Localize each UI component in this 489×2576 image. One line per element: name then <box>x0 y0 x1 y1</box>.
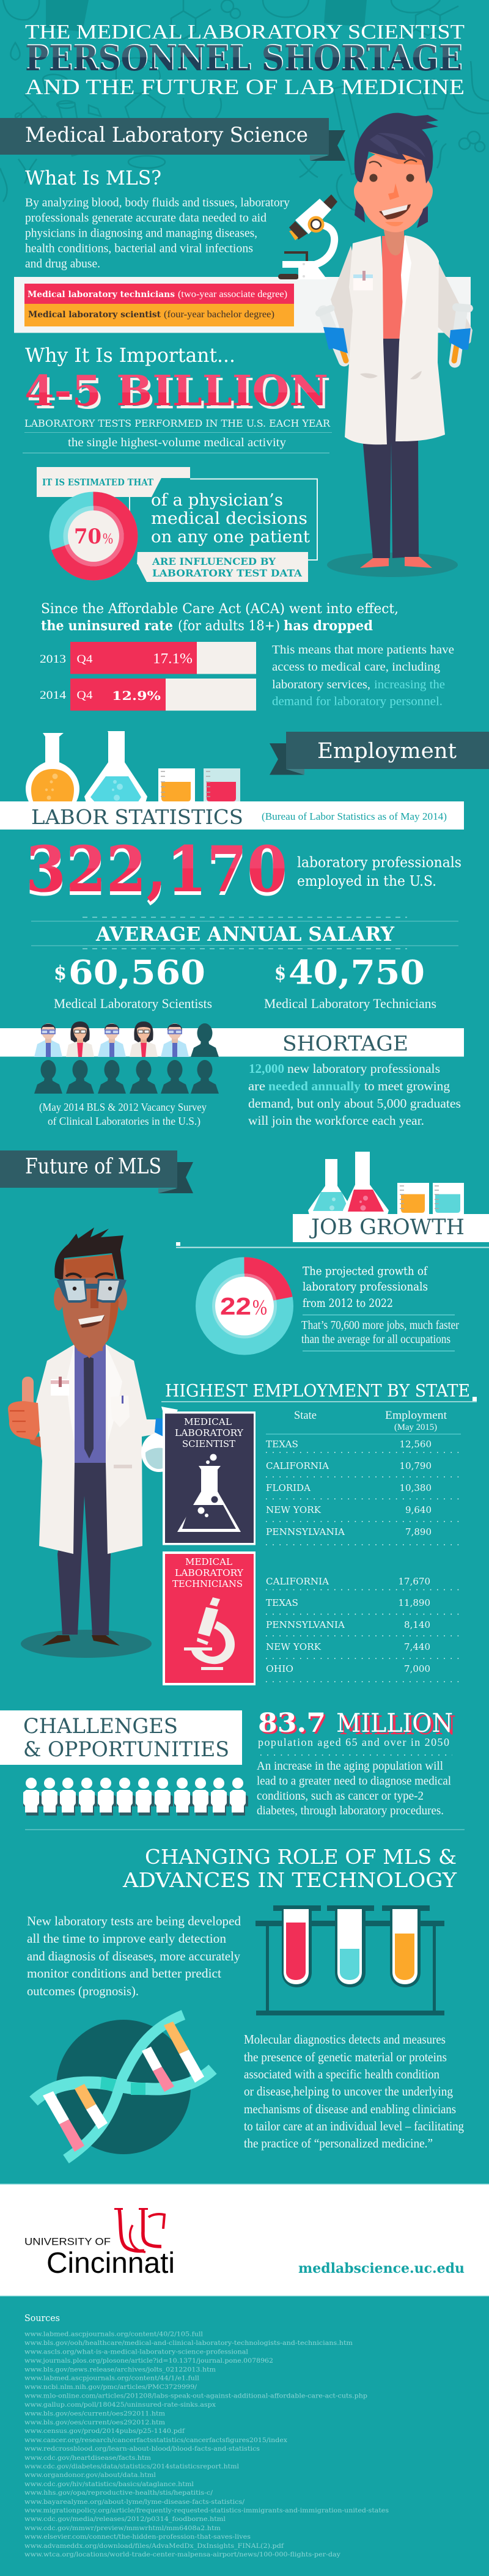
heading: changing role: ADVANCES IN TECHNOLOGY <box>122 1868 457 1892</box>
mouth <box>78 1315 105 1328</box>
text: job growth description: than the average for all occupations <box>301 1333 450 1346</box>
text block: source list: www.ascls.org/what-is-a-medical-laboratory-science-professional <box>24 2349 248 2356</box>
text: job growth description: The projected growth of <box>303 1264 428 1278</box>
heading: highest employment by state: HIGHEST EMPLOYMENT BY STATE <box>165 1381 470 1401</box>
heading: SHORTAGE <box>282 1032 408 1056</box>
degree row: scientist: (four-year bachelor degree) <box>164 309 274 320</box>
text block: source list: www.cdc.gov/heartdisease/facts.htm <box>24 2455 152 2462</box>
text: new laboratory tests: all the time to improve early detection <box>27 1931 226 1946</box>
text: meaning of the drop: This means that more patients have <box>272 643 454 657</box>
row texas: 12,560 <box>400 1438 432 1449</box>
ears <box>54 1287 64 1311</box>
title line 1: THE MEDICAL LABORATORY SCIENTIST <box>25 21 465 43</box>
text block: MLS description: physicians in diagnosing and managing diseases, <box>25 226 257 240</box>
text: aging population <box>257 1759 451 1817</box>
text block: source list: www.organdonor.gov/about/data.html <box>24 2472 156 2479</box>
icon: man scientist <box>8 1227 178 1658</box>
text: meaning of the drop: demand for laboratory personnel. <box>272 694 443 708</box>
salary: technicians: 40,750 <box>289 952 425 992</box>
callout statement: on any one patient <box>151 528 310 546</box>
donut chart 70% <box>49 491 138 581</box>
text: job growth description: from 2012 to 2022 <box>303 1297 393 1310</box>
text: shortage description: to meet growing <box>364 1078 450 1093</box>
row pennsylvania: PENNSYLVANIA <box>266 1619 345 1630</box>
text block: source list: www.bls.gov/oes/current/oes292012.htm <box>24 2420 166 2426</box>
ribbon tail <box>310 130 345 161</box>
UC monogram <box>114 2209 164 2252</box>
stat: 83.7 million <box>258 1708 456 1748</box>
text: laboratory professionals employed <box>297 855 461 889</box>
bar 2013: Q4 <box>77 653 93 666</box>
panel label: SCIENTIST <box>182 1440 235 1449</box>
text block: source list: www.migrationpolicy.org/article/frequently-requested-statistics-immigrants-and-immigration-united-states <box>24 2508 389 2514</box>
neck <box>384 226 404 256</box>
icon: glassware shelf <box>26 731 240 803</box>
degree row: technicians <box>24 284 294 304</box>
row california: CALIFORNIA <box>266 1460 329 1471</box>
panel: degree types <box>14 277 471 333</box>
row texas <box>266 1597 430 1608</box>
university of: UNIVERSITY OF <box>24 2236 111 2248</box>
big number: 4-5 billion: 4-5 BILLION <box>24 367 328 416</box>
donut chart 70%: 70 <box>74 524 101 549</box>
text block: source list: www.bls.gov/oes/current/oes292011.htm <box>24 2411 166 2418</box>
panel: footer logo band <box>0 2184 489 2297</box>
coat right <box>106 1344 160 1554</box>
row new york <box>266 1504 432 1515</box>
text: meaning of the drop: access to medical care, including <box>272 660 440 674</box>
bottom tab text: LABORATORY TEST DATA <box>152 567 303 579</box>
text: meaning of the drop: laboratory services, <box>272 678 370 691</box>
beaker orange <box>158 768 195 801</box>
text block: source list: www.bayarealyme.org/about-lyme/lyme-disease-facts-statistics/ <box>24 2499 245 2506</box>
face <box>62 1254 119 1356</box>
degree row: technicians: (two-year associate degree) <box>178 289 287 300</box>
degree row: scientist <box>24 304 294 326</box>
text: shortage source <box>39 1101 207 1128</box>
stat caption: population aged 65 and over in 2050 <box>258 1736 449 1748</box>
big number: 4-5 billion: 4-5 BILLION <box>27 370 331 419</box>
panel: medical laboratory technicians <box>163 1551 256 1685</box>
text: laboratory professionals employed: laboratory professionals <box>297 855 461 870</box>
row california: 10,790 <box>400 1460 432 1471</box>
table: technician employment by state <box>266 1576 462 1682</box>
bar chart: uninsured rate <box>40 642 256 710</box>
row california <box>266 1576 430 1587</box>
row california: CALIFORNIA <box>266 1576 329 1587</box>
text: shortage description: needed annually <box>268 1078 361 1093</box>
text block: MLS description: health conditions, bacterial and viral infections <box>25 242 253 256</box>
icon: DNA helix <box>34 2015 213 2159</box>
badge <box>51 1377 69 1396</box>
name badge <box>353 271 373 290</box>
text: new laboratory tests <box>27 1913 241 1998</box>
conical flask cyan <box>308 1159 353 1215</box>
right test tube <box>449 303 473 362</box>
icon: workforce people grid <box>34 1021 219 1094</box>
stat: 83.7 million: 83.7 <box>260 1710 328 1740</box>
bar 2014: 2014 <box>40 689 67 702</box>
text: shortage description: new laboratory professionals <box>287 1061 440 1076</box>
stat: 83.7 million: 83.7 <box>258 1708 326 1739</box>
row new york <box>266 1641 430 1652</box>
coat right <box>395 235 445 441</box>
salary: scientists <box>54 952 212 1011</box>
text: highest volume activity: the single highest-volume medical activity <box>68 436 286 449</box>
text block: source list: www.cdc.gov/media/releases/2012/p0314_foodborne.html <box>24 2516 226 2523</box>
text: aging population: diabetes, through laboratory procedures. <box>257 1804 444 1817</box>
heading: what is MLS: What Is MLS? <box>25 166 161 190</box>
shirt <box>75 1344 106 1463</box>
banner heading: Future of MLS <box>25 1154 161 1179</box>
rungs <box>43 2022 204 2152</box>
text: meaning of the drop: increasing the <box>374 678 445 691</box>
bar 2013: 17.1% <box>153 651 193 667</box>
sleeves <box>331 246 361 362</box>
icon: test tube rack <box>256 1905 444 2015</box>
panel: section banner employment <box>270 732 489 775</box>
panel label: TECHNICIANS <box>172 1580 243 1589</box>
tab text: IT IS ESTIMATED THAT <box>42 477 154 488</box>
text: shortage source: of Clinical Laboratories in the U.S.) <box>48 1115 200 1128</box>
text: molecular diagnostics: Molecular diagnostics detects and measures <box>244 2032 446 2047</box>
icon: woman scientist <box>314 113 473 577</box>
text: new laboratory tests: outcomes (prognosis). <box>27 1984 139 1998</box>
text: job growth description: laboratory professionals <box>303 1280 428 1294</box>
table header: (May 2015) <box>394 1422 437 1432</box>
panel: medical laboratory scientist <box>163 1411 256 1545</box>
icon: job growth glassware <box>308 1152 464 1215</box>
panel: section banner medical laboratory science <box>0 118 345 161</box>
feet <box>360 558 389 568</box>
icon: row of people <box>23 1778 248 1816</box>
degree row: technicians: Medical laboratory technicians <box>28 290 175 300</box>
text block: source list: www.mlo-online.com/articles/201208/labs-speak-out-against-additional-affordable-care-act-cuts.php <box>24 2393 367 2400</box>
text: molecular diagnostics: the presence of genetic material or proteins <box>244 2050 447 2064</box>
panel label: LABORATORY <box>175 1429 243 1438</box>
beaker orange <box>397 1183 429 1214</box>
row pennsylvania: PENNSYLVANIA <box>266 1526 345 1537</box>
text block: source list: www.ncbi.nlm.nih.gov/pmc/articles/PMC3729999/ <box>24 2384 197 2391</box>
text: meaning of the drop <box>272 643 454 708</box>
panel: challenges and opportunities heading: & OPPORTUNITIES <box>23 1737 229 1762</box>
icon: flask <box>177 1454 241 1532</box>
bar 2014 <box>40 679 256 710</box>
text: molecular diagnostics: associated with a specific health condition <box>244 2067 439 2081</box>
nose <box>388 183 399 200</box>
text block: source list: www.cdc.gov/mmwr/preview/mmwrhtml/mm6408a2.htm <box>24 2525 221 2532</box>
text: laboratory professionals employed: employed in the U.S. <box>297 874 436 889</box>
text: aging population: An increase in the aging population will <box>257 1759 443 1773</box>
row new york: NEW YORK <box>266 1641 322 1652</box>
banner heading: Medical Laboratory Science <box>25 123 308 147</box>
panel label: LABORATORY <box>175 1569 243 1578</box>
text block: source list: www.advameddx.org/download/files/AdvaMedDx_DxInsights_FINAL(2).pdf <box>24 2543 284 2550</box>
text block: source list: www.cdc.gov/diabetes/data/statistics/2014statisticsreport.html <box>24 2464 239 2470</box>
glasses <box>57 1279 127 1303</box>
mouth <box>379 204 411 219</box>
callout statement: medical decisions <box>151 509 307 528</box>
text block: source list: www.bls.gov/ooh/healthcare/medical-and-clinical-laboratory-technologists-and-technicians.htm <box>24 2340 353 2347</box>
text block: source list <box>24 2331 389 2558</box>
text: affordable care act: the uninsured rate <box>41 618 173 634</box>
text block: MLS description: By analyzing blood, body fluids and tissues, laboratory <box>25 196 290 209</box>
text: molecular diagnostics: mechanisms of disease and enabling clinicians <box>244 2102 456 2116</box>
salary: technicians: Medical Laboratory Technicians <box>264 996 436 1011</box>
text block: source list: www.bls.gov/news.release/archives/jolts_02122013.htm <box>24 2366 216 2373</box>
heading: average annual salary: AVERAGE ANNUAL SALARY <box>95 922 395 946</box>
text block: source list: www.gallup.com/poll/180425/uninsured-rate-sinks.aspx <box>24 2402 216 2409</box>
panel: job growth heading <box>293 1214 489 1242</box>
text: aging population: conditions, such as cancer or type-2 <box>257 1789 424 1803</box>
salary: scientists: $ <box>54 961 67 984</box>
big number: 322,170: 322,170 <box>26 836 287 910</box>
row florida <box>266 1482 432 1493</box>
round flask <box>26 733 79 803</box>
shirt <box>382 236 405 339</box>
text block: source list: www.elsevier.com/connect/the-hidden-profession-that-saves-lives <box>24 2534 251 2541</box>
row california <box>266 1460 432 1471</box>
stat: 83.7 million: MILLION <box>336 1708 453 1738</box>
table header: Employment <box>385 1409 447 1422</box>
bottom tab text <box>152 556 303 579</box>
heading: changing role <box>122 1845 457 1892</box>
heading: LABOR STATISTICS <box>31 805 243 829</box>
text block: source list: www.hhs.gov/opa/reproductive-health/stis/hepatitis-c/ <box>24 2490 213 2497</box>
text: affordable care act: (for adults 18+) <box>178 619 280 634</box>
floor shadow <box>327 553 458 577</box>
coat left <box>345 236 387 444</box>
text: affordable care act: has dropped <box>284 618 373 634</box>
source note: (Bureau of Labor Statistics as of May 2014) <box>262 811 447 822</box>
conical flask <box>84 731 147 803</box>
panel label <box>175 1418 243 1449</box>
banner heading: Employment <box>317 739 457 764</box>
coat pockets <box>360 374 378 378</box>
degree row: scientist: Medical laboratory scientist <box>28 310 161 320</box>
callout outline <box>130 479 317 560</box>
row texas: TEXAS <box>266 1438 298 1449</box>
text block: source list: www.labmed.ascpjournals.org/content/40/2/105.full <box>24 2331 203 2338</box>
row texas <box>266 1438 432 1449</box>
panel: challenges and opportunities heading <box>0 1710 242 1765</box>
eyebrows <box>66 1273 113 1278</box>
trousers <box>57 1458 111 1635</box>
website: medlabscience.uc.edu <box>298 2261 465 2276</box>
panel label: MEDICAL <box>185 1558 232 1567</box>
rack <box>256 1905 444 2015</box>
nose <box>90 1290 99 1308</box>
text: new laboratory tests: and diagnosis of diseases, more accurately <box>27 1949 240 1963</box>
text block: source list: www.journals.plos.org/plosone/article?id=10.1371/journal.pone.0078962 <box>24 2358 273 2364</box>
neck <box>78 1339 103 1351</box>
eyes <box>369 174 378 182</box>
flask in hand <box>141 1407 178 1472</box>
text: aging population: lead to a greater need to diagnose medical <box>257 1775 451 1788</box>
bar 2014: Q4 <box>77 689 93 702</box>
icon: microscope <box>278 194 337 279</box>
text block: source list: www.cdc.gov/hiv/statistics/basics/ataglance.html <box>24 2481 194 2488</box>
bar 2014: 12.9% <box>112 688 161 703</box>
cyan tube <box>335 1909 366 1987</box>
text: shortage description: 12,000 <box>249 1061 284 1076</box>
donut chart 22%: 22 <box>220 1294 251 1320</box>
background doodles <box>0 0 489 211</box>
beaker red <box>204 768 240 801</box>
icon: microscope <box>184 1597 235 1670</box>
donut chart 22% <box>196 1257 293 1355</box>
text: shortage description <box>248 1061 461 1128</box>
text: laboratory tests performed: LABORATORY TESTS PERFORMED IN THE U.S. EACH YEAR <box>24 418 331 429</box>
heading: sources: Sources <box>24 2313 60 2324</box>
row new york: 9,640 <box>405 1504 432 1515</box>
bottom tab text: ARE INFLUENCED BY <box>152 556 276 567</box>
text: molecular diagnostics <box>244 2032 464 2151</box>
panel: job growth heading: JOB GROWTH <box>309 1215 465 1240</box>
text: job growth description <box>301 1264 459 1351</box>
face <box>354 150 433 232</box>
text: molecular diagnostics: or disease,helping to uncover the underlying <box>244 2084 453 2099</box>
salary: scientists: Medical Laboratory Scientists <box>54 996 212 1011</box>
row ohio: OHIO <box>266 1663 293 1674</box>
text: shortage description: are <box>248 1078 265 1093</box>
red tube <box>282 1909 312 1987</box>
side hair <box>355 201 365 223</box>
row florida: 10,380 <box>400 1482 432 1493</box>
text: new laboratory tests: monitor conditions and better predict <box>27 1966 221 1981</box>
row new york: NEW YORK <box>266 1504 322 1515</box>
trousers centre <box>383 339 400 443</box>
panel: challenges and opportunities heading: CHALLENGES <box>23 1714 178 1739</box>
beaker cyan <box>433 1183 464 1214</box>
orange tube <box>390 1909 421 1987</box>
floor shadow <box>21 1630 152 1658</box>
legs <box>362 437 419 558</box>
callout tab top <box>37 467 190 497</box>
row texas: 11,890 <box>399 1597 430 1608</box>
row ohio <box>266 1663 430 1674</box>
row ohio: 7,000 <box>404 1663 430 1674</box>
salary: technicians: $ <box>274 961 286 984</box>
title line 3: AND THE FUTURE OF LAB MEDICINE <box>25 75 465 99</box>
logo: University of Cincinnati <box>24 2209 175 2280</box>
title <box>25 21 465 99</box>
panel label: MEDICAL <box>184 1418 232 1427</box>
text: shortage description: demand, but only about 5,000 graduates <box>248 1096 461 1111</box>
text: shortage source: (May 2014 BLS & 2012 Vacancy Survey <box>39 1101 207 1114</box>
big number: 322,170: 322,170 <box>26 833 287 907</box>
left test tube <box>314 304 348 361</box>
row pennsylvania: 8,140 <box>404 1619 430 1630</box>
bar 2013: 2013 <box>40 653 66 666</box>
text block: source list: www.census.gov/prod/2014pubs/p25-1140.pdf <box>24 2428 185 2435</box>
text: molecular diagnostics: the practice of “personalized medicine.” <box>244 2136 433 2151</box>
text block: source list: www.redcrossblood.org/learn-about-blood/blood-facts-and-statistics <box>24 2446 260 2453</box>
table header: State <box>294 1409 317 1422</box>
text block: source list: www.cancer.org/research/cancerfactsstatistics/cancerfactsfigures2015/index <box>24 2437 287 2444</box>
heading: why it is important: Why It Is Important... <box>25 344 235 367</box>
donut chart 70%: % <box>103 531 113 547</box>
text: affordable care act <box>41 602 399 634</box>
text: job growth description: That’s 70,600 more jobs, much faster <box>301 1319 459 1332</box>
callout tab bottom <box>128 552 308 582</box>
row pennsylvania: 7,890 <box>405 1526 432 1537</box>
text block: MLS description: and drug abuse. <box>25 257 100 270</box>
cincinnati: Cincinnati <box>46 2247 175 2280</box>
backdrop ellipse <box>56 2020 191 2154</box>
panel label <box>172 1558 243 1589</box>
text: affordable care act: Since the Affordable Care Act (ACA) went into effect, <box>41 602 399 617</box>
strand diagonal <box>66 2015 183 2159</box>
strand horizontal <box>34 2069 213 2101</box>
coat left <box>36 1344 75 1554</box>
shoes <box>42 1635 70 1646</box>
panel: 70 percent callout <box>37 467 317 582</box>
callout statement <box>151 491 310 546</box>
text block: source list: www.wtca.org/locations/world-trade-center-malpensa-airport/news/100-000-flights-per-day <box>24 2552 340 2558</box>
thumbs-up hand <box>8 1377 41 1448</box>
donut chart 22%: % <box>252 1295 267 1319</box>
tie <box>84 1356 94 1459</box>
heading: changing role: CHANGING ROLE OF MLS & <box>145 1845 457 1869</box>
table: scientist employment by state <box>266 1409 462 1545</box>
text block: MLS description <box>25 196 290 270</box>
row florida: FLORIDA <box>266 1482 311 1493</box>
hair <box>355 113 438 183</box>
text: molecular diagnostics: to tailor care at an individual level – facilitating <box>244 2119 464 2133</box>
text block: MLS description: professionals generate accurate data needed to aid <box>25 212 267 225</box>
eyebrows <box>369 161 381 167</box>
conical flask red <box>343 1152 389 1215</box>
row new york: 7,440 <box>404 1641 430 1652</box>
row pennsylvania <box>266 1619 430 1630</box>
hair <box>54 1227 124 1281</box>
text block: source list: www.labmed.ascpjournals.org/content/44/1/e1.full <box>24 2375 199 2382</box>
row california: 17,670 <box>399 1576 430 1587</box>
table header <box>294 1409 447 1432</box>
panel: shortage band <box>0 1028 464 1056</box>
callout statement: of a physician’s <box>151 491 283 510</box>
row texas: TEXAS <box>266 1597 298 1608</box>
row pennsylvania <box>266 1526 432 1537</box>
panel: labor statistics heading <box>0 801 464 830</box>
pocket and pen <box>111 1396 132 1468</box>
stat: 83.7 million: MILLION <box>339 1710 456 1740</box>
salary: scientists: 60,560 <box>68 952 205 992</box>
salary: technicians <box>264 952 436 1011</box>
bar 2013 <box>40 642 256 674</box>
panel: section banner future of MLS <box>0 1150 193 1193</box>
text: new laboratory tests: New laboratory tests are being developed <box>27 1913 241 1928</box>
text: shortage description: will join the workforce each year. <box>248 1113 424 1128</box>
